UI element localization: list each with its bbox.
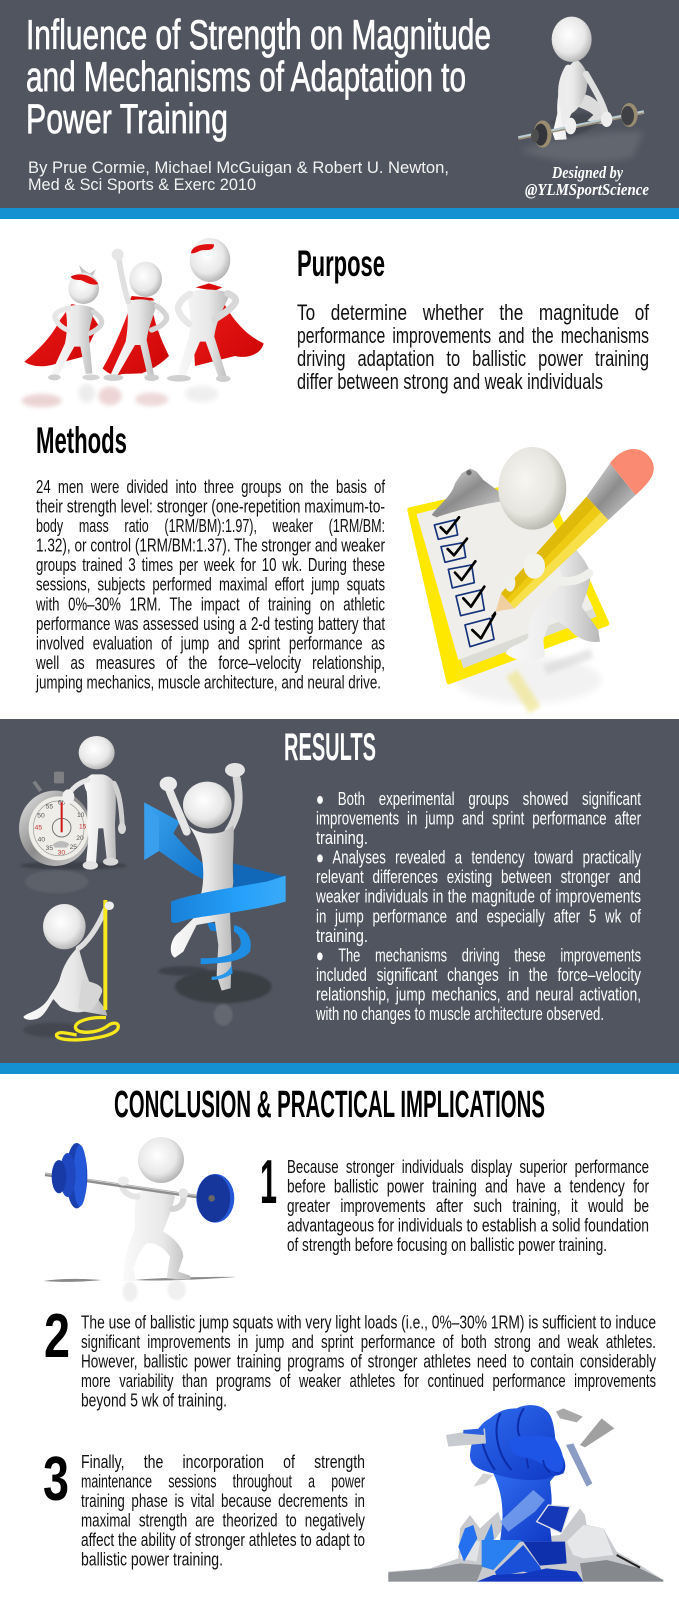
figure body [498,447,600,661]
purpose text [297,300,650,394]
title: Power Training [26,95,228,142]
stopwatch: 60 [58,800,66,807]
icon: seated figure with measuring tape [23,900,118,1040]
torso and near leg [553,61,588,140]
flying shards [446,1408,614,1487]
stopwatch: 25 [70,844,77,851]
designed by credit [525,163,649,199]
methods text: well as measures of the force–velocity relationship, [35,652,385,673]
icon: figure squatting barbell [43,1137,237,1302]
arms [562,68,568,122]
icon: figure lifting barbell [518,17,644,162]
numeral: 3: 3 [43,1445,69,1514]
figure: seated [23,904,107,1020]
stopwatch: 15 [79,823,87,830]
pencil [492,449,654,617]
stopwatch: 20 [76,835,84,842]
illustration: three caped figures [22,238,264,407]
title: Influence of Strength on Magnitude [26,11,491,58]
icon: cheering figure with blue arrow [144,763,286,1026]
barbell [45,1174,213,1199]
methods text: groups trained 3 times per week for 10 wk. During these [36,554,385,575]
measuring tape [57,900,118,1040]
methods text: involved evaluation of jump and sprint performance as [36,632,385,653]
arm and fist [470,1405,570,1542]
icon: stopwatch with figure [19,736,127,893]
methods text: 24 men were divided into three groups on the basis of [36,476,386,497]
methods text: body mass ratio (1RM/BM):1.97), weaker (1RM/BM: [36,515,385,536]
far leg [575,94,605,124]
checklist boxes [434,520,494,647]
stopwatch: 55 [46,803,53,810]
illustration: figure with clipboard and pencil [410,447,654,710]
title: and Mechanisms of Adaptation to [26,53,466,100]
illustration: blue fist breaking through glass [388,1405,663,1582]
stopwatch: 10 [77,812,85,819]
stopwatch: 35 [46,845,53,852]
methods text: performance was assessed using a 2-d testing battery that [36,613,385,634]
methods text: 1.32), or control (1RM/BM:1.37). The stronger and weaker [36,535,385,556]
stopwatch: 50 [37,813,45,820]
methods text: sessions, subjects performed maximal effort jump squats [36,574,385,595]
rubble [388,1508,663,1582]
results text: training. [316,925,368,946]
conclusion text 3: ballistic power training. [81,1549,223,1570]
conclusion text 3: maximal strength are theorized to negatively [81,1510,366,1531]
panel: header [0,0,679,219]
arrow head and shaft [144,802,205,880]
figure: middle hero [103,249,169,381]
figure: standing [62,736,126,870]
methods text: with 0%–30% 1RM. The impact of training on athletic [35,593,385,614]
title [26,11,491,142]
text: 1 [260,1148,277,1217]
clipboard [410,468,607,682]
check marks [441,517,495,638]
conclusion text 3: Finally, the incorporation of strength [81,1451,365,1472]
conclusion text 3 [81,1451,366,1570]
blue shards at base [477,1540,583,1582]
stopwatch: 30 [58,849,65,856]
figure: right hero [167,238,264,382]
panel: purpose [297,243,650,394]
hands [565,118,576,134]
authors and journal [28,158,449,194]
heading: methods: Methods [36,420,127,461]
stopwatch [19,772,91,866]
figure: left hero [24,265,102,380]
results text [315,788,642,1024]
panel: results [0,719,679,1074]
methods text [35,476,386,692]
ribbon front [171,876,286,923]
stopwatch: 45 [35,825,42,832]
heading: purpose: Purpose [297,243,385,284]
conclusion text 1 [287,1156,649,1255]
designed by credit: @YLMSportScience [525,180,649,199]
designed by credit: Designed by [551,163,623,182]
ribbon back [233,863,285,888]
conclusion text 2: beyond 5 wk of training. [81,1390,227,1411]
conclusion text 2 [81,1312,657,1411]
figure: cheering [160,763,245,991]
conclusion text 3: maintenance sessions throughout a power [81,1470,365,1492]
methods text: jumping mechanics, muscle architecture, and neural drive. [35,672,381,692]
authors and journal: Med & Sci Sports & Exerc 2010 [28,175,256,194]
barbell [518,112,644,138]
figure body [122,1190,191,1281]
methods text: their strength level: stronger (one-repetition maximum-to- [36,496,385,516]
conclusion text 3: training phase is vital because decrements in [81,1490,365,1511]
numeral: 2: 2 [44,1302,70,1371]
stopwatch: 40 [38,837,45,844]
conclusion text 3: affect the ability of stronger athletes to adapt to [81,1529,365,1550]
results text: training. [316,827,368,848]
authors and journal: By Prue Cormie, Michael McGuigan & Robert U. Newton, [28,158,449,177]
heading: results: RESULTS [284,726,376,769]
panel: methods [35,420,386,692]
